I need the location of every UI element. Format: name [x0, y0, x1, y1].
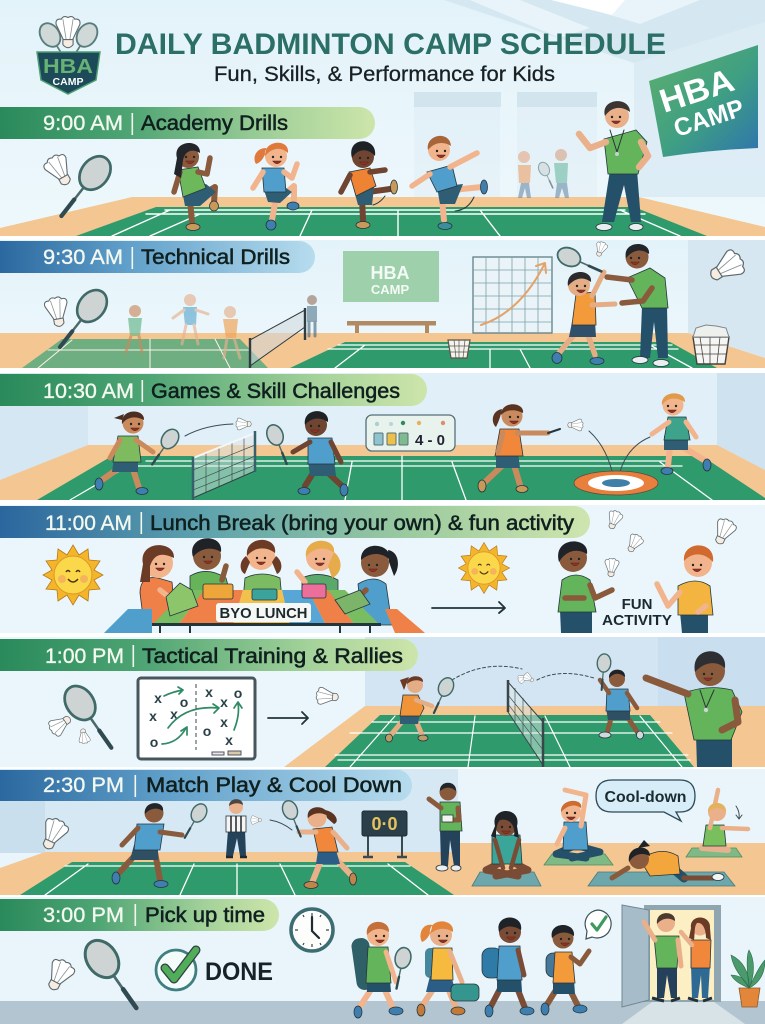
tactics whiteboard: x [149, 708, 157, 724]
icon: shuttlecock top right [704, 247, 748, 288]
floating shuttlecocks [604, 509, 738, 577]
icon: shuttlecock [316, 687, 339, 706]
kid 2: high knee, orange ponytail [253, 143, 299, 230]
side walls [717, 373, 765, 470]
floor [284, 706, 765, 767]
icon: sun right [458, 542, 510, 594]
heading bar: 11:00 AM: Lunch Break (bring your own) & fun activity [150, 512, 575, 535]
referee [226, 799, 247, 857]
door with parents [622, 905, 745, 1024]
kid 1: high knee, green shirt [174, 143, 218, 230]
heading bar: 1:00 PM: 1:00 PM [45, 645, 124, 668]
kid, blue shirt, ponytail [350, 546, 398, 625]
girl with duffel bag [417, 921, 479, 1016]
coach helping kid [607, 244, 669, 366]
parent, orange shirt [681, 918, 712, 1001]
shot arc and shuttle [185, 418, 251, 436]
court [76, 207, 707, 236]
gym wall [0, 769, 458, 852]
heading bar: 1:00 PM [0, 639, 418, 671]
kid, orange shirt, ponytail [478, 404, 560, 492]
kid, orange shirt [140, 545, 180, 625]
left wall [0, 373, 88, 480]
label: fun activity: FUN [622, 596, 652, 613]
boy, yellow shirt [657, 545, 713, 633]
lunch boxes [166, 583, 370, 616]
label: BYO lunch: BYO LUNCH [220, 605, 308, 622]
banner: HBA camp [649, 45, 758, 157]
kid, green shirt, dark hair [190, 538, 232, 600]
kid, green shirt, pigtails [241, 540, 282, 600]
tactics whiteboard: x [220, 694, 228, 710]
girl with racket [386, 675, 457, 742]
tactics whiteboard: x [220, 714, 228, 730]
speech bubble: cool-down [596, 780, 695, 821]
tactics whiteboard: x [154, 690, 162, 706]
parent, green shirt [644, 913, 681, 1001]
boy with racket [595, 653, 644, 739]
shuttle and bounce arcs [568, 419, 650, 480]
kid with racket, green shirt [95, 411, 182, 494]
seated girl on mat [472, 811, 541, 886]
arrow [432, 602, 505, 613]
icon: small shuttlecock [593, 240, 609, 258]
basket small [448, 340, 470, 358]
heading bar: 10:30 AM: 10:30 AM [43, 380, 134, 403]
panel: 11:00 AM lunch break and fun activity [0, 505, 765, 633]
boy, green shirt [558, 541, 612, 633]
speech bubble: cool-down: Cool-down [604, 789, 686, 806]
floor [0, 333, 765, 368]
wall banner: HBA [370, 263, 410, 283]
girl stretching on mat [686, 790, 748, 857]
heading bar: 11:00 AM [0, 506, 590, 538]
court [37, 456, 765, 500]
heading bar: 10:30 AM: Games & Skill Challenges [151, 380, 400, 403]
coach with clipboard [429, 783, 462, 871]
kid in child pose on mat [588, 840, 735, 886]
title: DAILY BADMINTON CAMP SCHEDULE [115, 28, 666, 61]
gym wall [365, 637, 765, 767]
kid with racket [552, 244, 615, 364]
icon: shuttlecock and racket [41, 150, 117, 224]
speech bubble: check [585, 910, 611, 939]
back wall windows [414, 92, 597, 197]
panel: 1:00 PM tactical training and rallies [0, 637, 765, 767]
heading bar: 9:00 AM: Academy Drills [141, 112, 288, 135]
wall banner: CAMP [371, 282, 409, 297]
basket large with shuttlecocks [693, 325, 729, 364]
tactics whiteboard: x [170, 706, 178, 722]
tactics whiteboard: x [205, 684, 213, 700]
court [20, 862, 454, 895]
floor [0, 843, 765, 895]
bench [347, 321, 436, 333]
icon: racket and shuttlecocks [46, 680, 122, 756]
logo: HBA camp: CAMP [53, 76, 83, 88]
kid, green shirt, blonde [297, 541, 341, 600]
kid 4: kick and point, blue shirt [412, 136, 488, 230]
heading bar: 10:30 AM [0, 374, 427, 406]
left court [22, 339, 268, 368]
scoreboard: 4 - 0 [415, 432, 445, 449]
panel: 3:00 PM pick up time [0, 897, 765, 1024]
icon: check in circle [156, 950, 196, 990]
background kids [518, 149, 569, 198]
match scoreboard [362, 811, 407, 857]
heading bar: 9:30 AM: Technical Drills [141, 246, 290, 269]
arrow [268, 712, 308, 724]
heading bar: 2:30 PM [0, 770, 412, 801]
banner: HBA camp: CAMP [670, 94, 747, 143]
tactics whiteboard: o [203, 723, 211, 739]
panel: 2:30 PM match play and cool down [0, 769, 765, 895]
kid with racket, blue shirt [264, 411, 348, 496]
subtitle: Fun, Skills, & Performance for Kids [214, 63, 555, 86]
icon: shuttlecock [36, 815, 71, 853]
boy with blue backpack [482, 917, 534, 1017]
tactics whiteboard [138, 678, 255, 759]
wall banner [343, 251, 439, 302]
heading bar: 1:00 PM: Tactical Training & Rallies [142, 645, 403, 668]
court [325, 715, 694, 767]
heading bar: 3:00 PM [0, 899, 279, 931]
heading bar: 9:30 AM [0, 241, 315, 273]
floor [0, 1001, 765, 1024]
floor [0, 197, 765, 236]
kid, teal shirt [652, 393, 711, 474]
icon: shuttlecock and racket [41, 934, 149, 1017]
icon: racket and shuttlecock [44, 284, 113, 355]
icon: clock [291, 909, 333, 951]
match scoreboard: 0·0 [371, 814, 398, 834]
picnic table [104, 590, 425, 633]
heading bar: 2:30 PM: Match Play & Cool Down [146, 774, 402, 797]
heading bar: 9:00 AM: 9:00 AM [43, 112, 123, 135]
net [508, 680, 543, 767]
boy with backpack waving [541, 925, 589, 1015]
background players and net [126, 294, 317, 358]
panel: 10:30 AM games and skill challenges [0, 373, 765, 500]
net [193, 431, 255, 500]
right court [290, 342, 717, 368]
tactics whiteboard: x [225, 732, 233, 748]
logo: HBA camp [35, 17, 102, 94]
tactics whiteboard: o [180, 694, 188, 710]
seated boy stretching on mat [544, 790, 613, 865]
ceiling beams and light [444, 0, 765, 197]
chart whiteboard [473, 257, 552, 333]
label: fun activity: ACTIVITY [602, 612, 672, 629]
banner: HBA camp: HBA [655, 61, 738, 120]
kids at lunch [140, 538, 398, 625]
coach pointing [579, 101, 648, 230]
label: done: DONE [205, 958, 273, 986]
heading bar: 9:30 AM: 9:30 AM [43, 246, 123, 269]
panel: 9:30 AM technical drills [0, 240, 765, 368]
tactics whiteboard: o [234, 685, 242, 701]
kid 3: kick, orange shirt [341, 141, 398, 228]
heading bar: 9:00 AM [0, 107, 375, 139]
small shuttle with arc [251, 816, 292, 830]
net [250, 308, 305, 368]
icon: sun left [43, 545, 103, 605]
kid with racket bag [350, 922, 413, 1018]
heading bar: 3:00 PM: 3:00 PM [43, 904, 124, 927]
heading bar: 3:00 PM: Pick up time [145, 904, 265, 927]
scoreboard [366, 415, 455, 451]
coach pointing [646, 651, 742, 767]
heading bar: 2:30 PM: 2:30 PM [43, 774, 124, 797]
girl player, orange shirt [280, 798, 356, 888]
plant [731, 950, 765, 1007]
side wall [688, 240, 765, 358]
tactics whiteboard: o [150, 734, 158, 750]
target [574, 471, 658, 495]
label: fun activity [602, 596, 672, 629]
logo: HBA camp: HBA [43, 56, 93, 78]
rally arcs and shuttles [452, 666, 594, 684]
heading bar: 11:00 AM: 11:00 AM [45, 512, 132, 535]
panel: header and 9:00 AM academy drills [0, 0, 765, 236]
player, blue shirt [112, 801, 210, 888]
floor [0, 445, 765, 500]
